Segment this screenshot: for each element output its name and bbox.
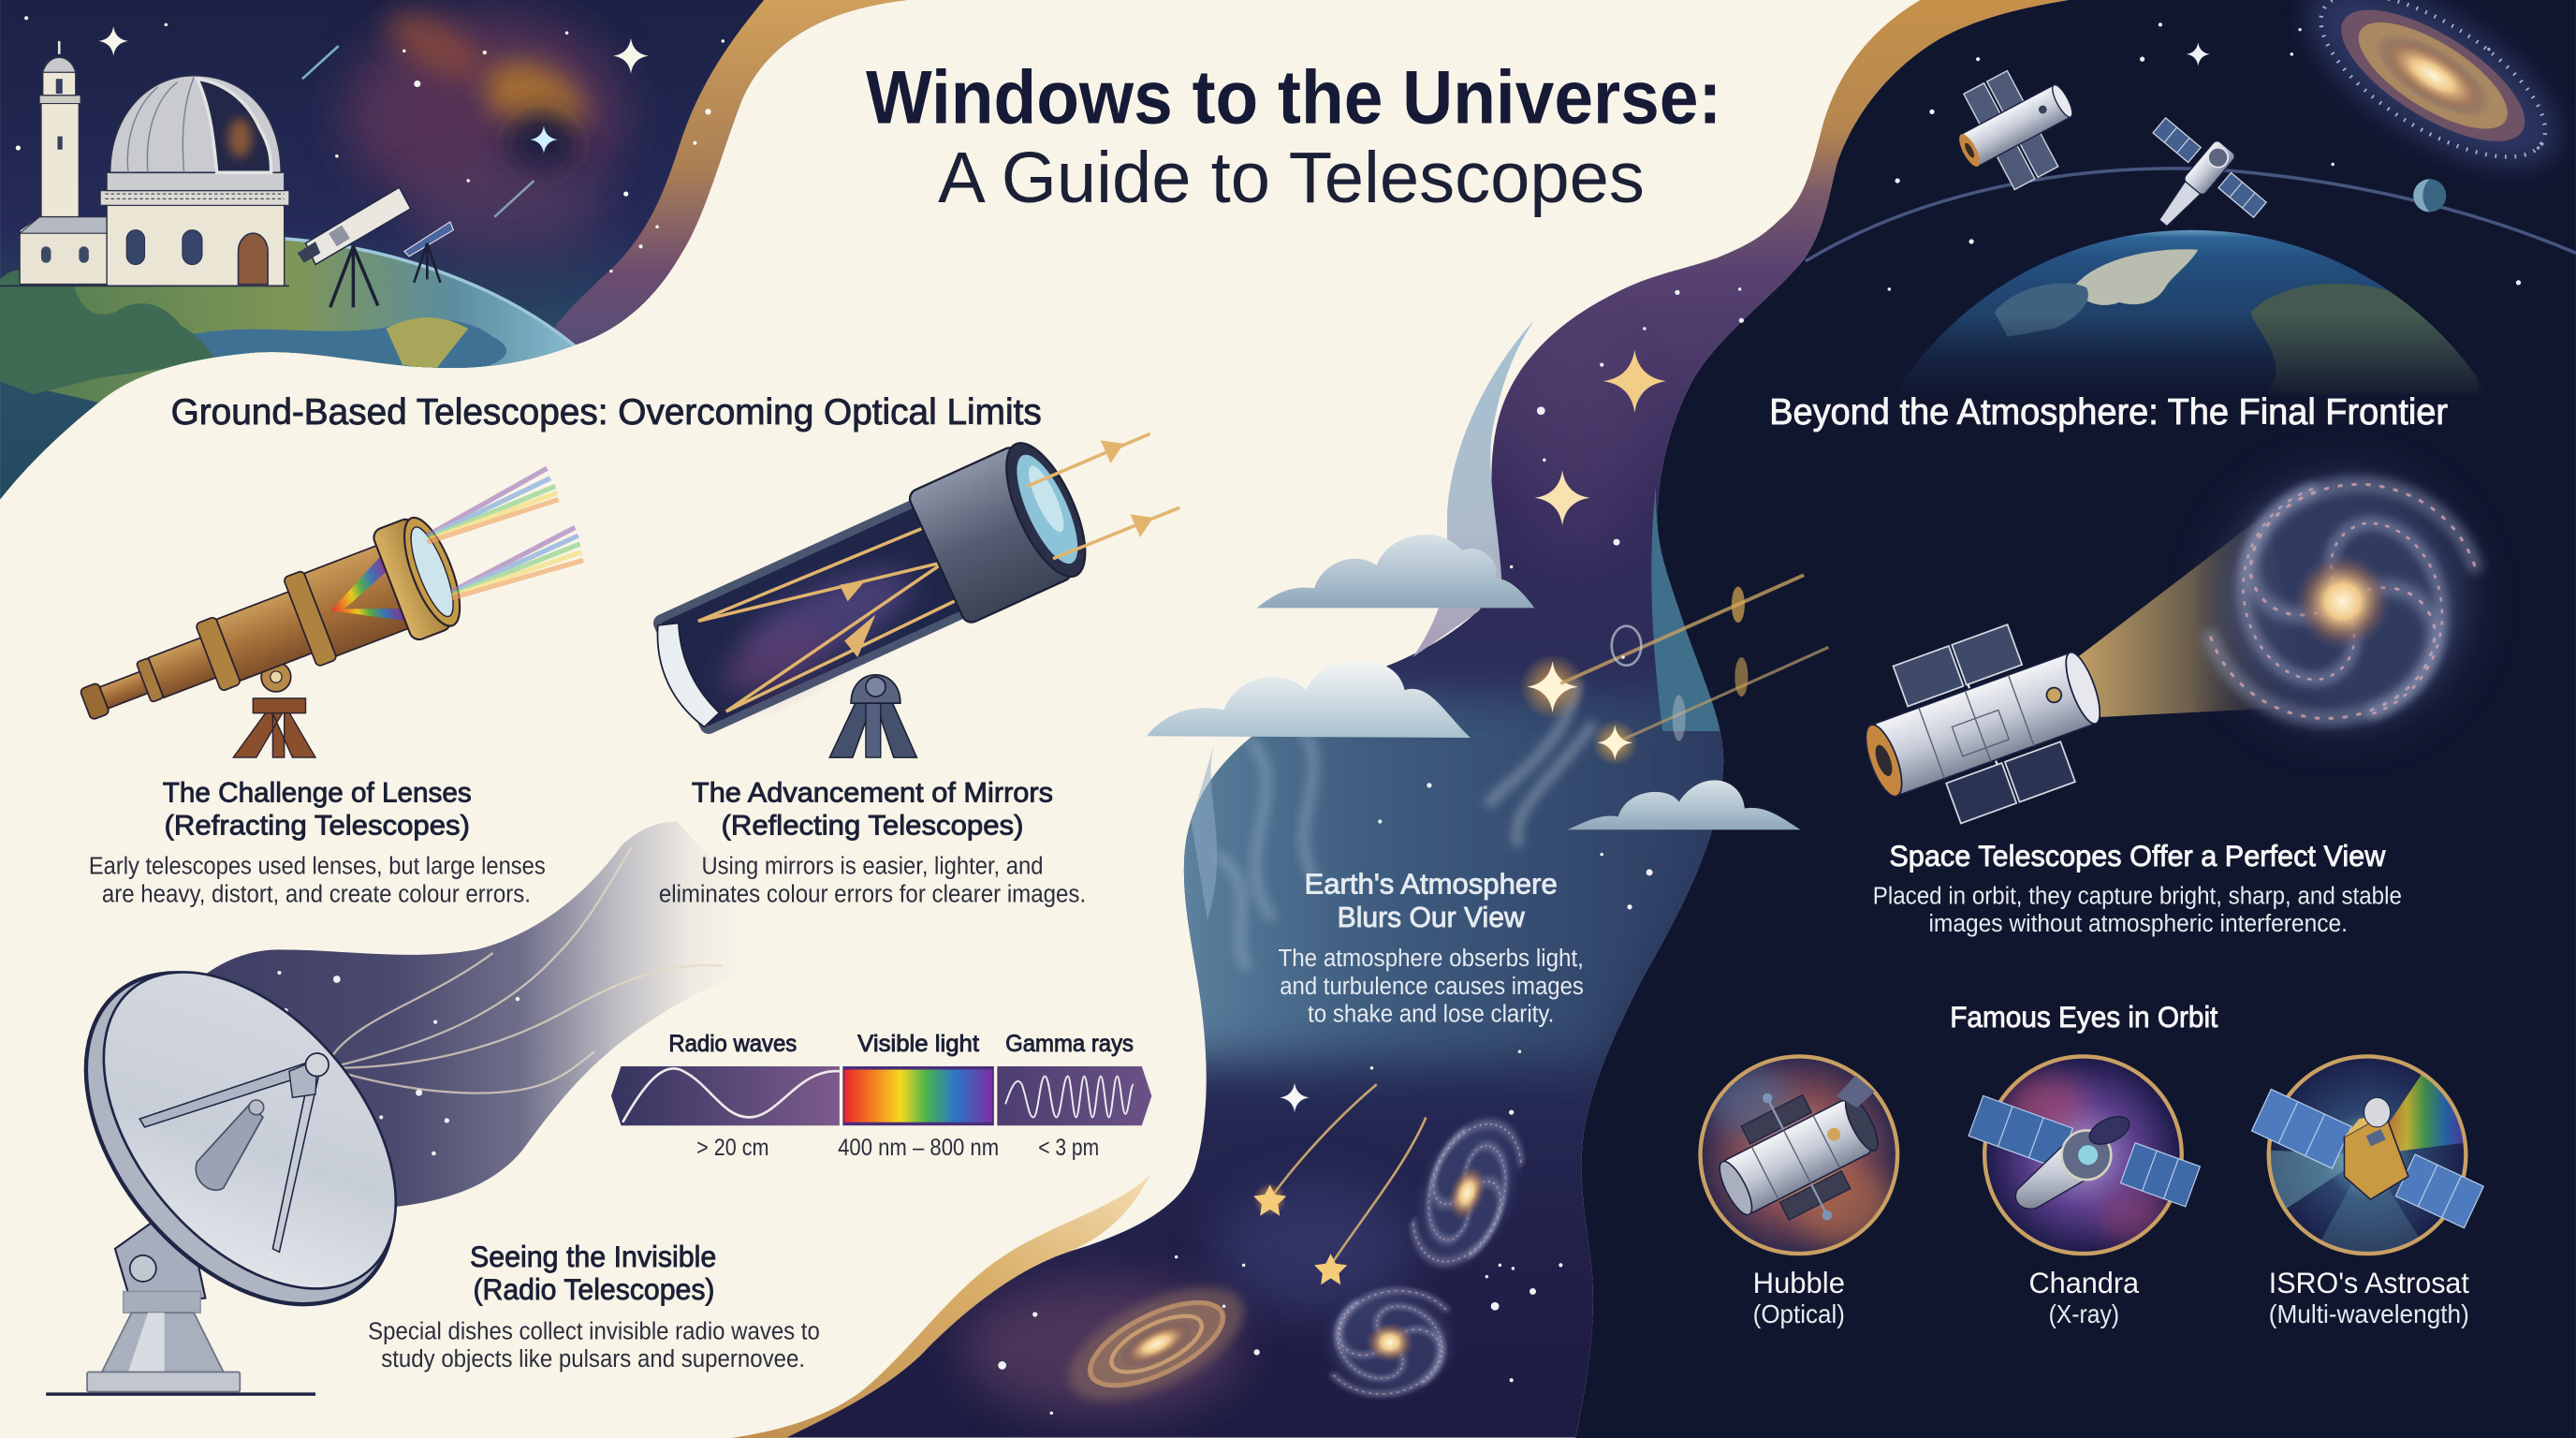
text block: advancement of mirrors: The Advancement of Mirrors <box>692 777 1053 808</box>
badge: chandra <box>1969 1056 2200 1254</box>
text block: seeing the invisible <box>368 1240 820 1372</box>
panel: space (right dark background) <box>1575 0 2576 1438</box>
right side stars <box>1888 22 2539 291</box>
text block: seeing the invisible: Seeing the Invisible <box>470 1240 716 1273</box>
label: astrosat <box>2269 1266 2469 1328</box>
text block: advancement of mirrors: (Reflecting Telescopes) <box>722 811 1023 842</box>
heading: ground-based telescopes: Ground-Based Telescopes: Overcoming Optical Limits <box>171 392 1042 433</box>
text block: atmosphere <box>1278 868 1584 1028</box>
text block: atmosphere: Earth's Atmosphere <box>1305 868 1558 901</box>
label: astrosat: (Multi-wavelength) <box>2269 1299 2469 1328</box>
text block: challenge of lenses: The Challenge of Lenses <box>163 777 472 808</box>
spectrum band: radio <box>611 1066 840 1125</box>
text block: challenge of lenses: are heavy, distort, and create colour errors. <box>102 880 531 908</box>
spectrum labels top: Visible light <box>857 1032 979 1057</box>
central strip stars <box>998 287 1744 1415</box>
spectrum chart <box>611 1032 1151 1161</box>
meteors <box>1253 1084 1426 1284</box>
badge: astrosat <box>2252 1056 2483 1257</box>
text block: space telescopes: Space Telescopes Offer a Perfect View <box>1889 839 2386 873</box>
text block: challenge of lenses: Early telescopes used lenses, but large lenses <box>89 852 546 880</box>
title: A Guide to Telescopes <box>938 138 1645 218</box>
heading: beyond the atmosphere: Beyond the Atmosphere: The Final Frontier <box>1769 392 2448 433</box>
light beam <box>2073 513 2308 718</box>
text block: atmosphere: to shake and lose clarity. <box>1308 1000 1554 1028</box>
icon: small white telescope <box>298 187 453 307</box>
label: hubble: Hubble <box>1753 1266 1845 1299</box>
label: chandra: Chandra <box>2029 1266 2140 1299</box>
heading: famous eyes in orbit: Famous Eyes in Orbit <box>1950 1000 2218 1034</box>
label: chandra <box>2029 1266 2140 1328</box>
text block: seeing the invisible: study objects like pulsars and supernovee. <box>381 1344 805 1372</box>
spectrum labels bottom: > 20 cm <box>696 1136 768 1161</box>
spectrum band: gamma <box>997 1066 1151 1125</box>
label: hubble <box>1753 1266 1845 1328</box>
label: hubble: (Optical) <box>1753 1299 1845 1328</box>
radio wave nebula <box>172 822 805 1208</box>
text block: space telescopes <box>1873 839 2402 937</box>
text block: atmosphere: The atmosphere obserbs light, <box>1278 944 1584 972</box>
title: Windows to the Universe: <box>866 56 1721 140</box>
cloud upper <box>1257 535 1534 608</box>
gold swoosh bottom <box>731 1175 1150 1438</box>
spectrum labels top: Gamma rays <box>1005 1032 1134 1057</box>
icon: big earth <box>1900 230 2481 391</box>
text block: atmosphere: and turbulence causes images <box>1280 972 1584 1000</box>
spectrum labels bottom <box>696 1136 1099 1161</box>
text block: advancement of mirrors: eliminates colour errors for clearer images. <box>659 880 1086 908</box>
spectrum labels bottom: < 3 pm <box>1038 1136 1099 1161</box>
gold stars and blurred light <box>1280 349 1828 1112</box>
spectrum band: visible <box>842 1066 994 1125</box>
icon: radio dish <box>24 915 456 1394</box>
text block: space telescopes: images without atmospheric interference. <box>1928 909 2348 937</box>
panel: atmosphere band (central nebula strip) <box>772 0 2086 1438</box>
galaxy: small spiral lower <box>1331 1291 1449 1394</box>
rainbow rays from the lens <box>427 468 583 598</box>
galaxy: top right <box>2282 0 2576 200</box>
label: astrosat: ISRO's Astrosat <box>2269 1266 2469 1299</box>
text block: atmosphere: Blurs Our View <box>1338 901 1526 933</box>
spectrum labels top <box>668 1032 1134 1057</box>
text block: advancement of mirrors: Using mirrors is easier, lighter, and <box>701 852 1044 880</box>
icon: reflecting telescope <box>642 433 1179 757</box>
galaxy: bottom large <box>1052 1264 1261 1424</box>
galaxy: big spiral <box>2189 446 2496 757</box>
spectrum labels bottom: 400 nm – 800 nm <box>838 1136 999 1161</box>
light blue atmosphere swoosh <box>1412 320 1534 657</box>
night sky panel: top left <box>0 0 906 500</box>
label: chandra: (X-ray) <box>2049 1299 2119 1328</box>
cloud lower <box>1567 780 1801 829</box>
text block: challenge of lenses: (Refracting Telescopes) <box>165 811 470 842</box>
icon: small hubble telescope <box>1939 51 2094 203</box>
icon: observatory <box>0 41 289 286</box>
text block: space telescopes: Placed in orbit, they capture bright, sharp, and stable <box>1873 881 2402 909</box>
text block: advancement of mirrors <box>659 777 1086 908</box>
top left stars <box>16 16 724 272</box>
spectrum labels top: Radio waves <box>668 1032 797 1057</box>
title <box>866 56 1721 218</box>
galaxy: small spiral middle <box>1402 1109 1532 1277</box>
icon: large space telescope <box>1842 604 2123 845</box>
text block: seeing the invisible: (Radio Telescopes) <box>474 1272 714 1306</box>
icon: refracting telescope <box>65 509 472 760</box>
orbit arc and moon <box>1806 169 2576 261</box>
icon: earth horizon top left <box>0 238 583 403</box>
cloud middle <box>1147 660 1471 920</box>
badge: hubble <box>1698 1054 1900 1256</box>
text block: seeing the invisible: Special dishes collect invisible radio waves to <box>368 1316 820 1344</box>
icon: small chandra satellite <box>2113 105 2276 265</box>
text block: challenge of lenses <box>89 777 546 908</box>
